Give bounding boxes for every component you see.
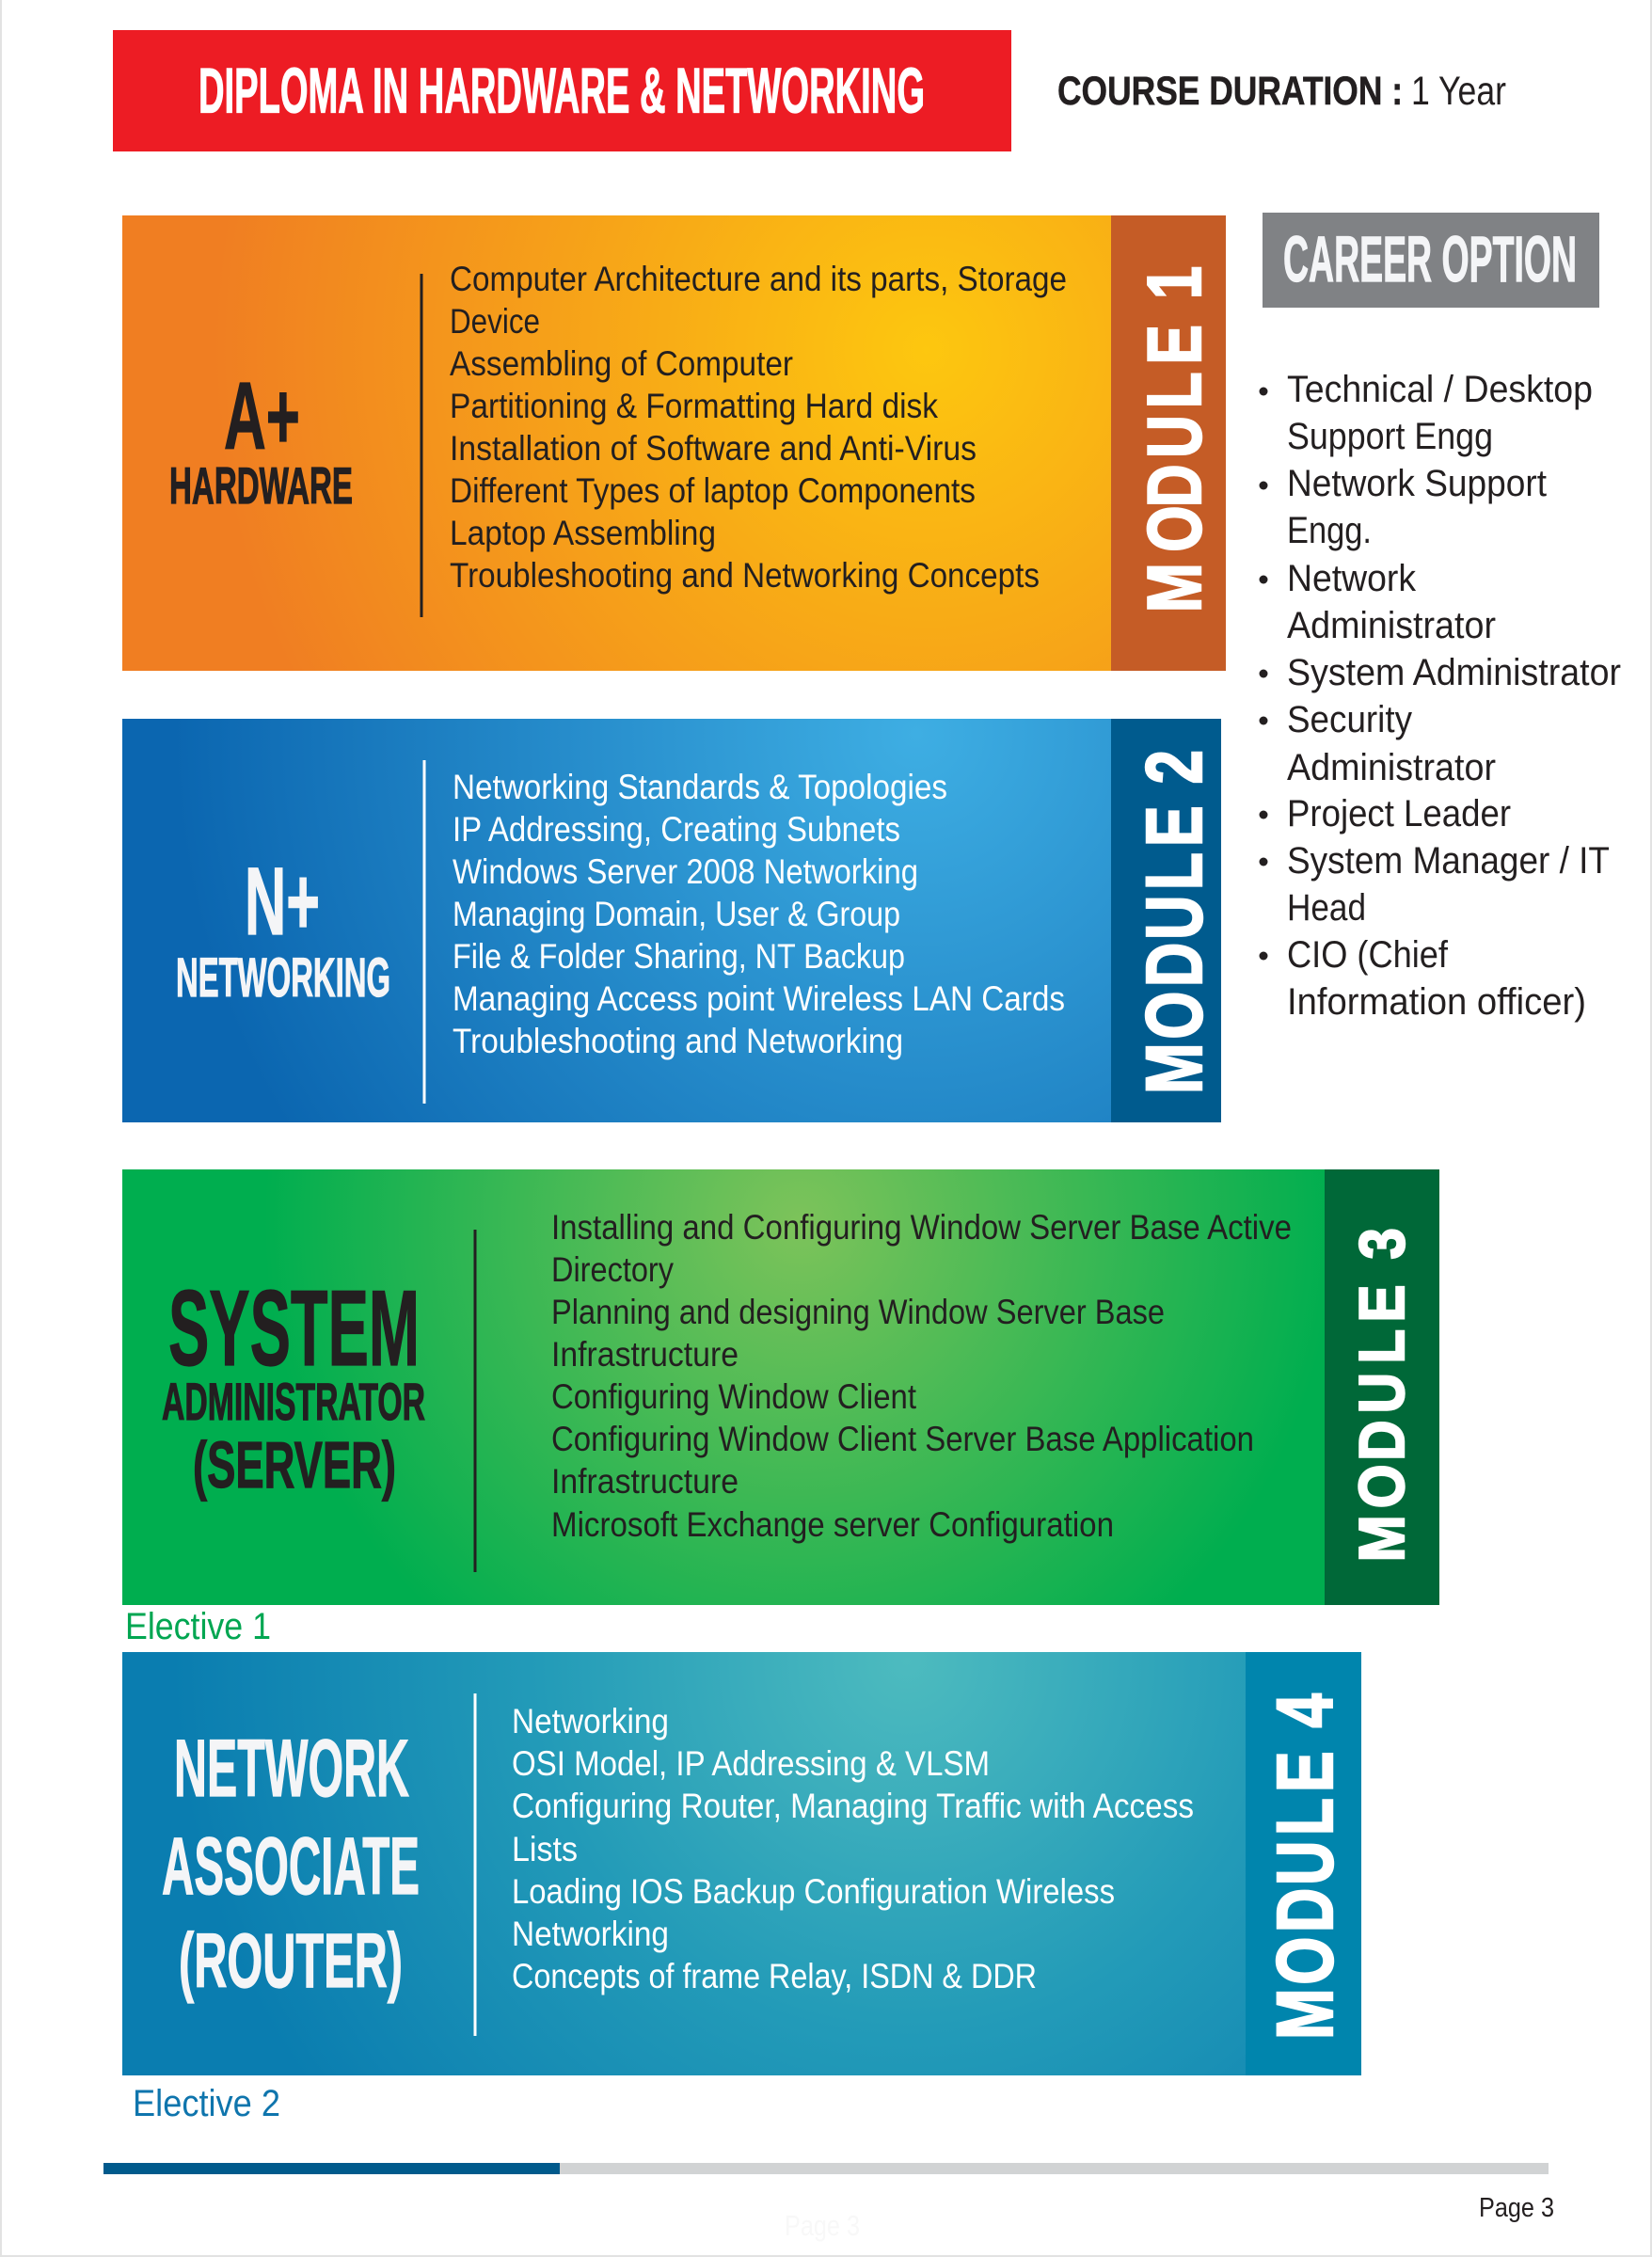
heading: N+ networking: NETWORKING <box>176 947 390 1009</box>
heading: network associate (router): (ROUTER) <box>179 1918 403 2004</box>
career list: Head <box>1287 887 1366 929</box>
panel: career option <box>1259 213 1621 1023</box>
career list: CIO (Chief <box>1287 934 1449 976</box>
topic list: module 2: Troubleshooting and Networking <box>453 1022 903 1060</box>
heading: N+ networking <box>176 848 390 1009</box>
module 3 label: MODULE 3 <box>1345 1228 1418 1562</box>
topic list: module 3 <box>551 1208 1292 1544</box>
course duration: COURSE DURATION : <box>1057 69 1403 114</box>
career list: System Manager / IT <box>1287 840 1610 882</box>
topic list: module 2: IP Addressing, Creating Subnets <box>453 810 900 849</box>
topic list: module 1: Installation of Software and Anti-Virus <box>450 429 977 468</box>
topic list: module 4 <box>512 1702 1194 1995</box>
topic list: module 2: Managing Access point Wireless LAN Cards <box>453 979 1065 1018</box>
career list: Project Leader <box>1287 793 1511 834</box>
career list: Engg. <box>1287 510 1372 551</box>
heading: system administrator (server): ADMINISTRATOR <box>162 1372 425 1431</box>
heading: network associate (router) <box>162 1724 420 2004</box>
topic list: module 1: Device <box>450 302 540 341</box>
career heading <box>1263 213 1599 308</box>
title banner: DIPLOMA IN HARDWARE & NETWORKING <box>199 55 925 126</box>
topic list: module 1: Laptop Assembling <box>450 514 716 552</box>
topic list: module 1: Different Types of laptop Components <box>450 471 976 510</box>
topic list: module 4: Lists <box>512 1830 578 1868</box>
topic list: module 4: Concepts of frame Relay, ISDN & DDR <box>512 1957 1037 1995</box>
elective 2 label: Elective 2 <box>133 2083 280 2124</box>
topic list: module 4: Loading IOS Backup Configuration Wireless <box>512 1872 1115 1911</box>
topic list: module 4: OSI Model, IP Addressing & VLSM <box>512 1744 990 1783</box>
heading: network associate (router): ASSOCIATE <box>162 1821 420 1912</box>
heading: A+ hardware <box>169 364 353 515</box>
page number: Page 3 <box>1479 2193 1554 2223</box>
topic list: module 2: Windows Server 2008 Networking <box>453 852 918 891</box>
career list <box>1259 369 1621 1023</box>
topic list: module 1: Partitioning & Formatting Hard disk <box>450 387 938 425</box>
panel: module 2 networking <box>122 719 1221 1122</box>
topic list: module 3: Installing and Configuring Window Server Base Active <box>551 1208 1292 1247</box>
topic list: module 3: Configuring Window Client Server Base Application <box>551 1420 1254 1458</box>
heading: A+ hardware: A+ <box>224 364 300 469</box>
heading: A+ hardware: HARDWARE <box>169 456 353 515</box>
career list: Network <box>1287 558 1417 599</box>
module 4 label: MODULE 4 <box>1261 1693 1349 2040</box>
topic list: module 1 <box>450 260 1067 595</box>
topic list: module 2: Managing Domain, User & Group <box>453 895 900 933</box>
topic list: module 2: File & Folder Sharing, NT Backup <box>453 937 905 976</box>
topic list: module 3: Planning and designing Window Server Base <box>551 1293 1165 1331</box>
topic list: module 3: Infrastructure <box>551 1462 739 1501</box>
topic list: module 2: Networking Standards & Topologies <box>453 768 947 806</box>
topic list: module 3: Directory <box>551 1250 674 1289</box>
career list: Administrator <box>1287 747 1496 788</box>
topic list: module 3: Configuring Window Client <box>551 1377 917 1416</box>
panel: module 3 system administrator <box>122 1169 1439 1605</box>
footer progress bar <box>103 2163 1549 2174</box>
topic list: module 2 <box>453 768 1065 1060</box>
topic list: module 1: Troubleshooting and Networking Concepts <box>450 556 1040 595</box>
career list: Security <box>1287 699 1412 740</box>
career list: Administrator <box>1287 605 1496 646</box>
career list: Information officer) <box>1287 981 1586 1023</box>
heading: system administrator (server) <box>162 1269 425 1502</box>
module 2 label: MODULE 2 <box>1130 750 1218 1094</box>
course duration: 1 Year <box>1411 69 1506 114</box>
career list: System Administrator <box>1287 652 1621 693</box>
topic list: module 1: Assembling of Computer <box>450 344 793 383</box>
topic list: module 3: Infrastructure <box>551 1335 739 1374</box>
topic list: module 4: Configuring Router, Managing Traffic with Access <box>512 1787 1194 1825</box>
career list: Network Support <box>1287 463 1547 504</box>
career list: Support Engg <box>1287 416 1493 457</box>
module 1 label: MODULE 1 <box>1133 266 1217 612</box>
topic list: module 3: Microsoft Exchange server Configuration <box>551 1505 1114 1544</box>
elective 1 label: Elective 1 <box>125 1606 271 1647</box>
topic list: module 4: Networking <box>512 1702 669 1740</box>
panel: module 4 network associate <box>122 1652 1361 2075</box>
topic list: module 1: Computer Architecture and its parts, Storage <box>450 260 1067 298</box>
panel: module 1 hardware <box>122 215 1226 671</box>
career list: Technical / Desktop <box>1287 369 1593 410</box>
heading: system administrator (server): SYSTEM <box>168 1269 420 1389</box>
heading: system administrator (server): (SERVER) <box>193 1428 396 1502</box>
topic list: module 4: Networking <box>512 1915 669 1953</box>
title banner <box>113 30 1011 151</box>
heading: network associate (router): NETWORK <box>174 1724 409 1814</box>
faint page number: Page 3 <box>785 2209 860 2242</box>
heading: N+ networking: N+ <box>245 848 320 955</box>
